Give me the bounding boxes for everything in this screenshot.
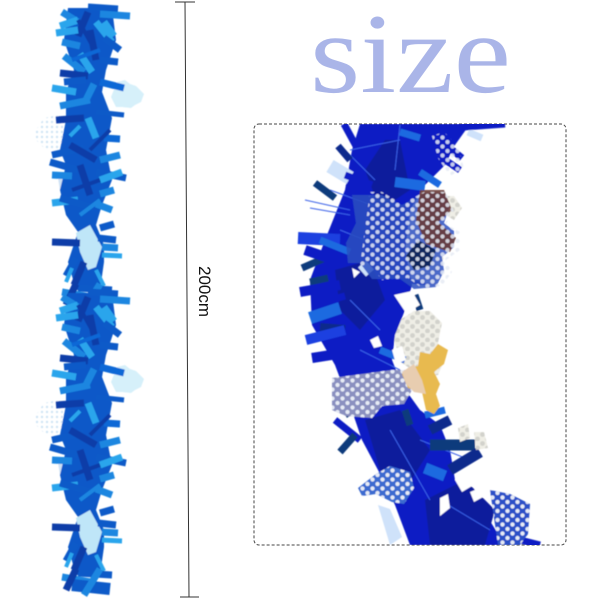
white gaps and strips <box>352 268 492 516</box>
garland photo: full length <box>36 7 144 595</box>
length label: 200cm <box>195 266 214 317</box>
snowflake: blue and brown dotted upper <box>346 193 454 289</box>
close-up panel <box>254 124 566 545</box>
snowflake: cream lower <box>392 311 446 377</box>
dotted fragments right <box>458 424 488 450</box>
gold snowflake fragment <box>402 344 448 414</box>
dimension line: 200cm <box>175 2 214 597</box>
garland close-up photo <box>298 124 540 545</box>
